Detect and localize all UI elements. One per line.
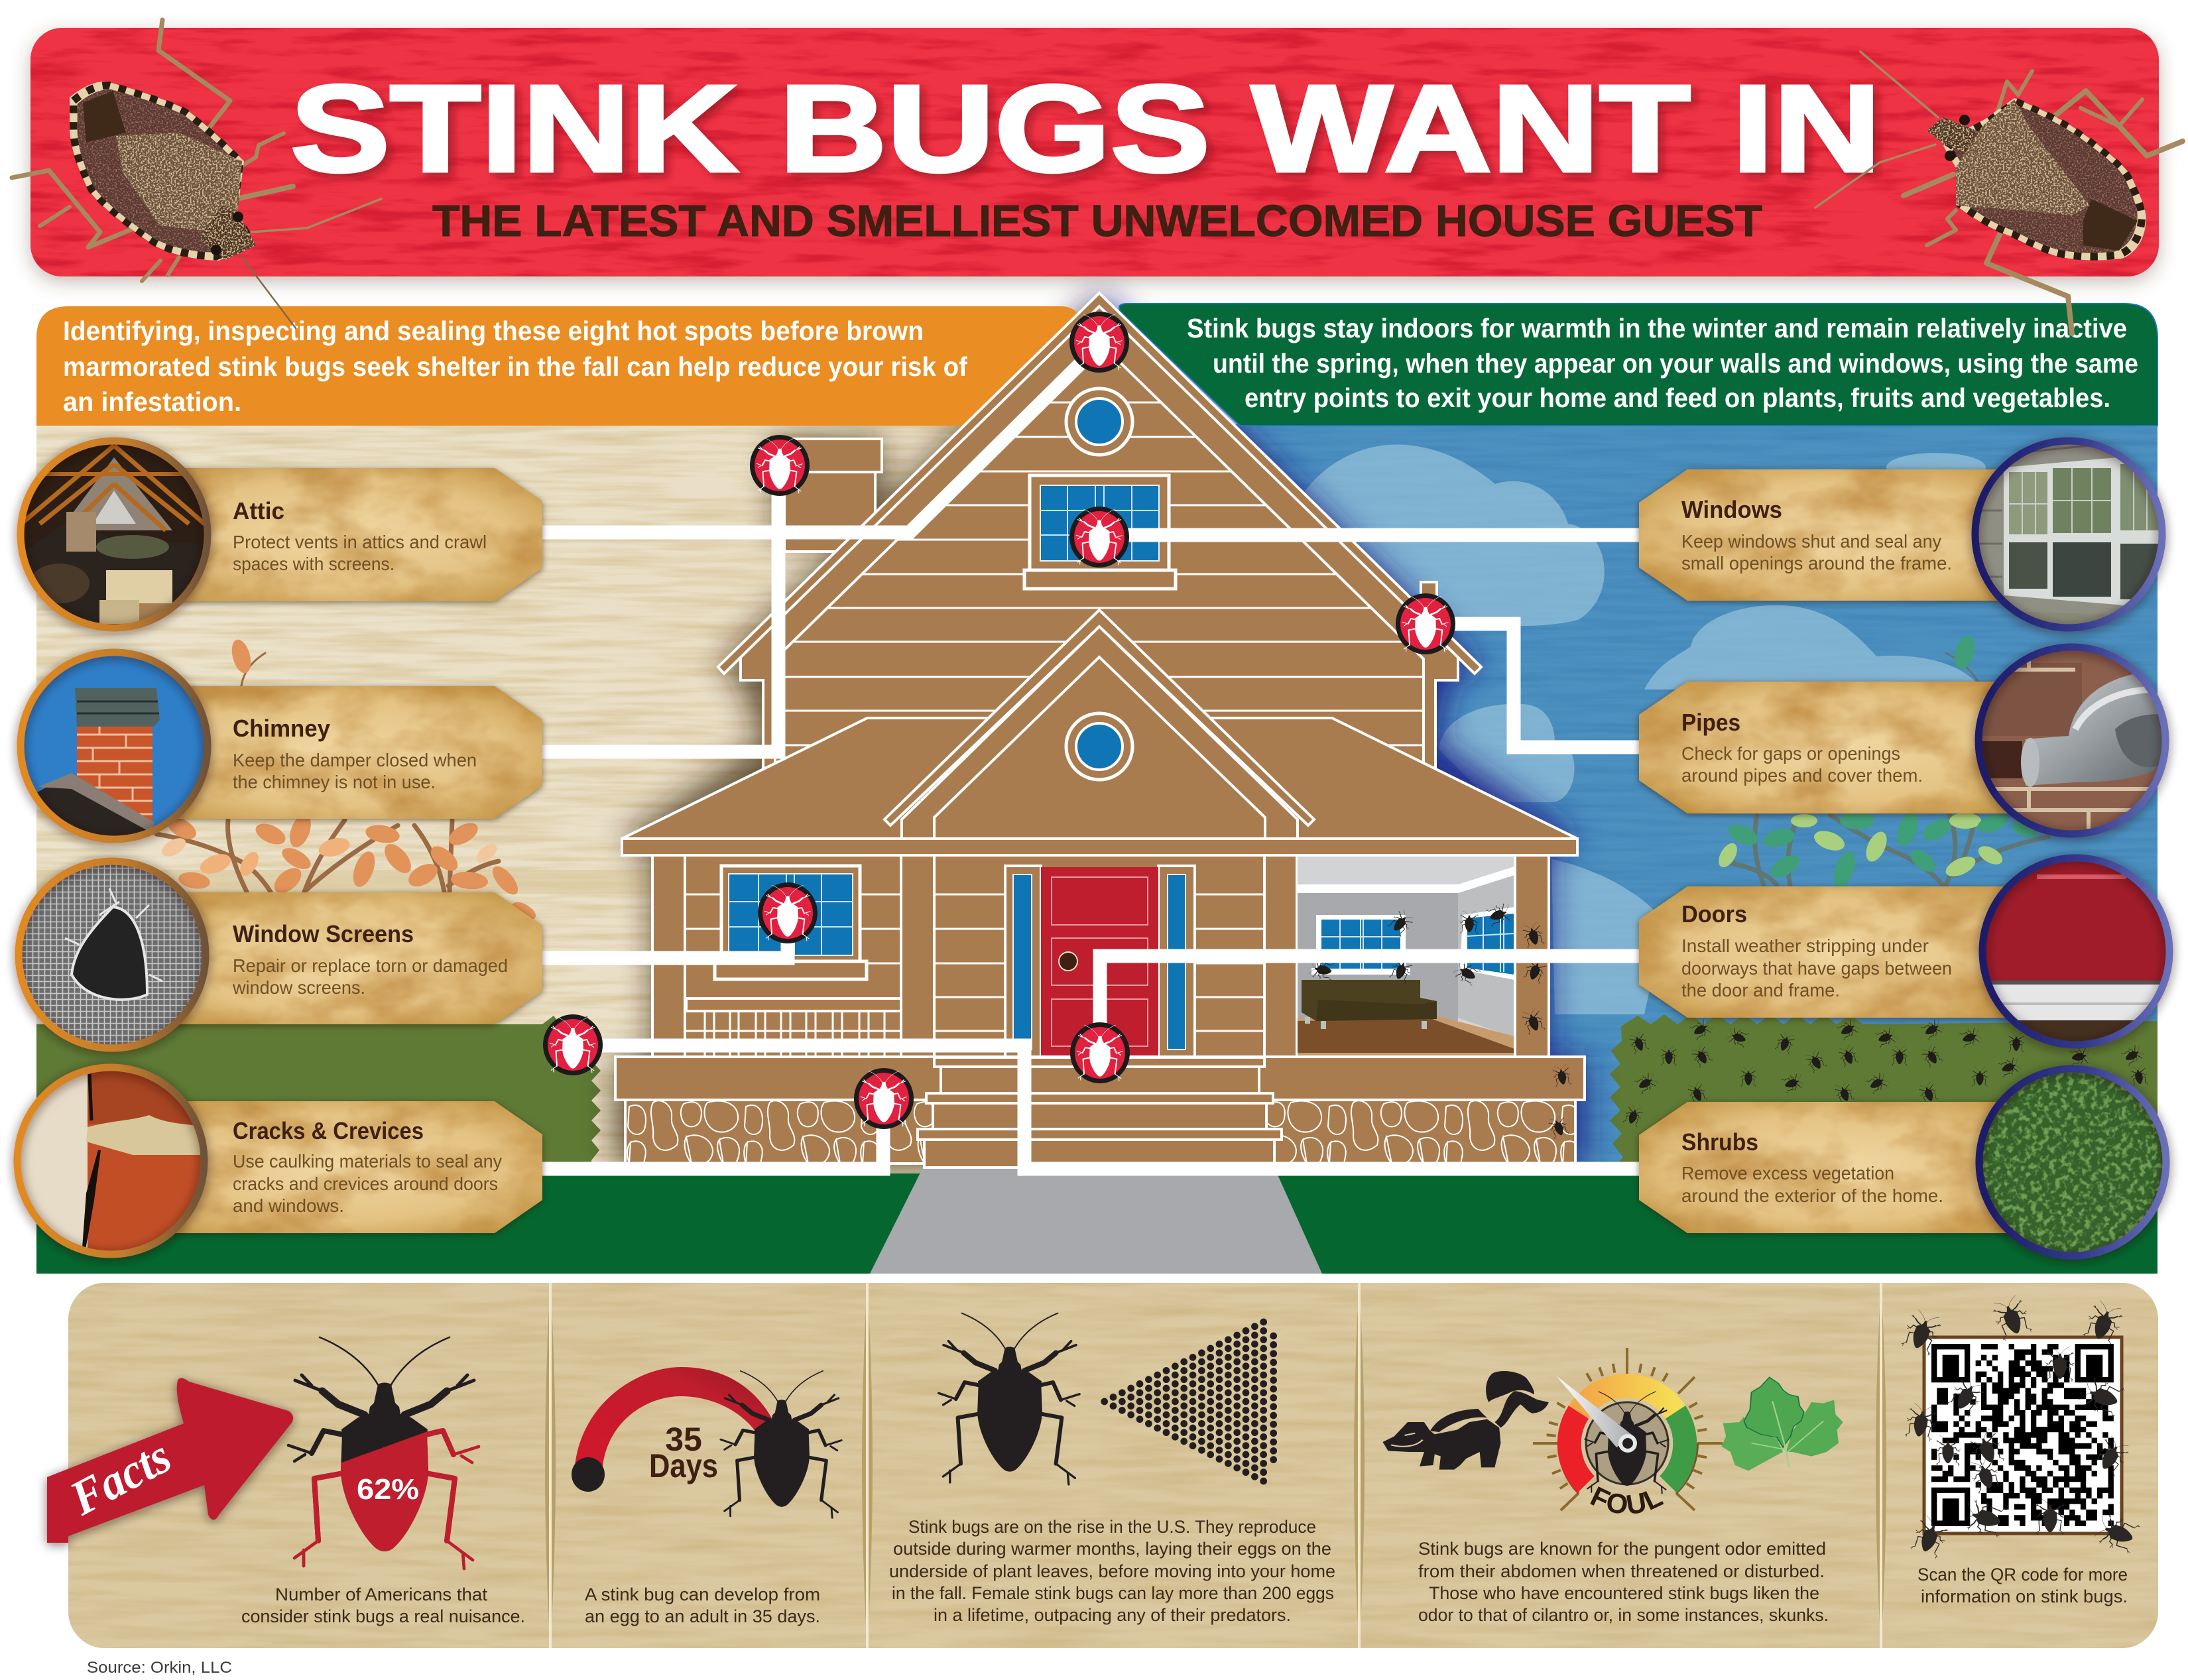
label: cracks and crevices: cracks and crevices around doors: [233, 1173, 498, 1194]
panel: green intro: Stink bugs stay indoors for warmth in the winter and remain relatively inactive: [1187, 313, 2127, 343]
label: chimney: [133, 686, 542, 819]
chimney: [779, 439, 882, 552]
icon: skunk: [1382, 1371, 1549, 1470]
photo: chimney: [17, 650, 212, 845]
house: [615, 293, 1585, 1168]
panel: title banner: [30, 28, 2159, 276]
label: shrubs: Shrubs: [1681, 1128, 1758, 1156]
label: shrubs: around the exterior of the home.: [1681, 1185, 1943, 1206]
QR code: [1900, 1293, 2140, 1559]
room interior: [1298, 857, 1514, 1055]
caption: 35 days: [585, 1585, 820, 1626]
panel: right blue sky background: [1094, 424, 2158, 1177]
label: doors: the door and frame.: [1681, 980, 1840, 1000]
label: cracks and crevices: Cracks & Crevices: [233, 1117, 424, 1144]
caption: reproduction: underside of plant leaves, before moving into your home: [889, 1561, 1335, 1581]
label: shrubs: [1639, 1102, 2042, 1233]
subtitle: THE LATEST AND SMELLIEST UNWELCOMED HOUSE GUEST: [432, 196, 1762, 246]
chart: 35 days arc: [572, 1367, 841, 1518]
label: attic: Attic: [233, 497, 284, 524]
chart: 35 days arc: 35: [665, 1421, 702, 1458]
label: windows: Keep windows shut and seal any: [1681, 531, 1941, 552]
caption: odor: [1418, 1539, 1829, 1625]
photo: shrubs: [1976, 1066, 2171, 1262]
photo: attic: [13, 438, 212, 633]
label: window screens: [133, 892, 542, 1024]
panel: left cream siding background: [36, 424, 1104, 1177]
right porch column: [1515, 855, 1549, 1057]
banner bug: right: [1815, 52, 2183, 333]
label: windows: [1639, 469, 2042, 601]
attic vent: [1066, 389, 1132, 455]
pins: [543, 312, 1455, 1129]
chart: 62 percent bug: 62%: [357, 1473, 419, 1506]
label: attic: spaces with screens.: [233, 554, 395, 574]
label: pipes: [1639, 682, 2042, 813]
label: windows: small openings around the frame.: [1681, 553, 1952, 573]
caption: odor: from their abdomen when threatened or disturbed.: [1418, 1561, 1825, 1581]
chart: 62 percent bug: [288, 1337, 479, 1569]
caption: QR code: [1917, 1565, 2128, 1606]
clouds: [1286, 444, 1986, 1014]
caption: reproduction: outside during warmer months, laying their eggs on the: [893, 1539, 1331, 1559]
panel: orange intro: an infestation.: [63, 387, 241, 417]
caption: reproduction: in the fall. Female stink bugs can lay more than 200 eggs: [892, 1583, 1334, 1603]
label: chimney: Keep the damper closed when: [233, 750, 477, 770]
photo: windows: [1973, 438, 2168, 633]
icon: odor gauge: [1533, 1348, 1723, 1514]
label: pipes: around pipes and cover them.: [1681, 765, 1923, 786]
label: windows: Windows: [1681, 496, 1782, 523]
label: cracks and crevices: Use caulking materials to seal any: [233, 1151, 502, 1171]
label: doors: doorways that have gaps between: [1681, 958, 1952, 979]
caption: QR code: Scan the QR code for more: [1917, 1565, 2128, 1585]
autumn tree: [156, 638, 538, 924]
walkway: [870, 1168, 1322, 1274]
source note: Source: Orkin, LLC: [87, 1659, 232, 1677]
caption: 35 days: an egg to an adult in 35 days.: [585, 1606, 820, 1626]
caption: 35 days: A stink bug can develop from: [585, 1585, 820, 1604]
caption: 62 percent: consider stink bugs a real nuisance.: [241, 1606, 525, 1626]
facts arrow: Facts: [61, 1429, 180, 1526]
panel: green intro: [1119, 304, 2158, 426]
label: window screens: Window Screens: [233, 920, 414, 947]
label: attic: [133, 468, 542, 601]
panel: orange intro: [36, 306, 1077, 426]
dividers: [545, 1283, 1886, 1648]
front steps: [918, 1057, 1282, 1168]
label: pipes: Pipes: [1681, 709, 1740, 736]
connector lines: [542, 363, 1644, 1169]
house shadow: [615, 293, 1585, 1167]
lower wall: [652, 855, 1549, 1057]
label: doors: [1639, 886, 2042, 1018]
ground: [36, 1173, 2158, 1274]
caption: odor: Those who have encountered stink bugs liken the: [1429, 1583, 1819, 1603]
facts arrow: [47, 1378, 293, 1543]
label: window screens: Repair or replace torn or damaged: [233, 955, 508, 976]
panel: orange intro: marmorated stink bugs seek shelter in the fall can help reduce your risk of: [63, 351, 967, 382]
panel: green intro: entry points to exit your home and feed on plants, fruits and vegetables.: [1245, 383, 2110, 413]
fascia: [622, 839, 1577, 855]
caption: reproduction: Stink bugs are on the rise in the U.S. They reproduce: [908, 1517, 1316, 1537]
caption: reproduction: [889, 1517, 1335, 1625]
caption: odor: odor to that of cilantro or, in some instances, skunks.: [1418, 1605, 1829, 1625]
title: STINK BUGS WANT IN: [290, 60, 1881, 198]
front door: [1005, 866, 1195, 1057]
icon: odor gauge: FOUL: [1590, 1486, 1664, 1514]
lower window: [715, 866, 867, 979]
label: chimney: Chimney: [233, 715, 330, 742]
photo: cracks: [13, 1064, 209, 1260]
banner bug: left: [12, 20, 381, 328]
porch roof: [622, 718, 1577, 839]
pipe vent: [1421, 582, 1437, 609]
label: shrubs: Remove excess vegetation: [1681, 1163, 1894, 1183]
caption: 62 percent: Number of Americans that: [275, 1585, 488, 1604]
panel: orange intro: Identifying, inspecting and sealing these eight hot spots before brown: [63, 316, 924, 346]
right shrub with bugs: [1610, 1014, 2158, 1180]
small bugs on house: [1309, 902, 1572, 1140]
label: pipes: Check for gaps or openings: [1681, 743, 1900, 764]
photo: window screen: [16, 859, 212, 1054]
porch deck: [615, 1057, 1585, 1100]
label: chimney: the chimney is not in use.: [233, 772, 436, 792]
gable: [884, 610, 1314, 839]
caption: reproduction: in a lifetime, outpacing any of their predators.: [934, 1605, 1291, 1625]
upper walls and roof: [716, 292, 1483, 768]
icon: bug and eggs: [939, 1313, 1274, 1484]
photo: pipes: [1976, 644, 2171, 840]
porch railing: [685, 998, 901, 1057]
label: cracks and crevices: [133, 1101, 542, 1233]
label: cracks and crevices: and windows.: [233, 1195, 344, 1216]
upper window: [1024, 475, 1176, 589]
caption: 62 percent: [241, 1585, 525, 1626]
label: doors: Install weather stripping under: [1681, 935, 1929, 956]
caption: odor: Stink bugs are known for the pungent odor emitted: [1418, 1539, 1826, 1559]
label: doors: Doors: [1681, 900, 1747, 928]
panel: facts: [39, 1283, 2158, 1648]
green tree: [1715, 633, 2049, 890]
label: window screens: window screens.: [232, 977, 365, 998]
label: attic: Protect vents in attics and crawl: [233, 532, 487, 552]
caption: QR code: information on stink bugs.: [1921, 1587, 2128, 1606]
left shrub: [36, 1016, 601, 1180]
chart: 35 days arc: Days: [649, 1447, 718, 1484]
photo: doors: [1979, 855, 2175, 1050]
foundation: [625, 1100, 1575, 1164]
icon: cilantro leaf: [1721, 1377, 1843, 1470]
